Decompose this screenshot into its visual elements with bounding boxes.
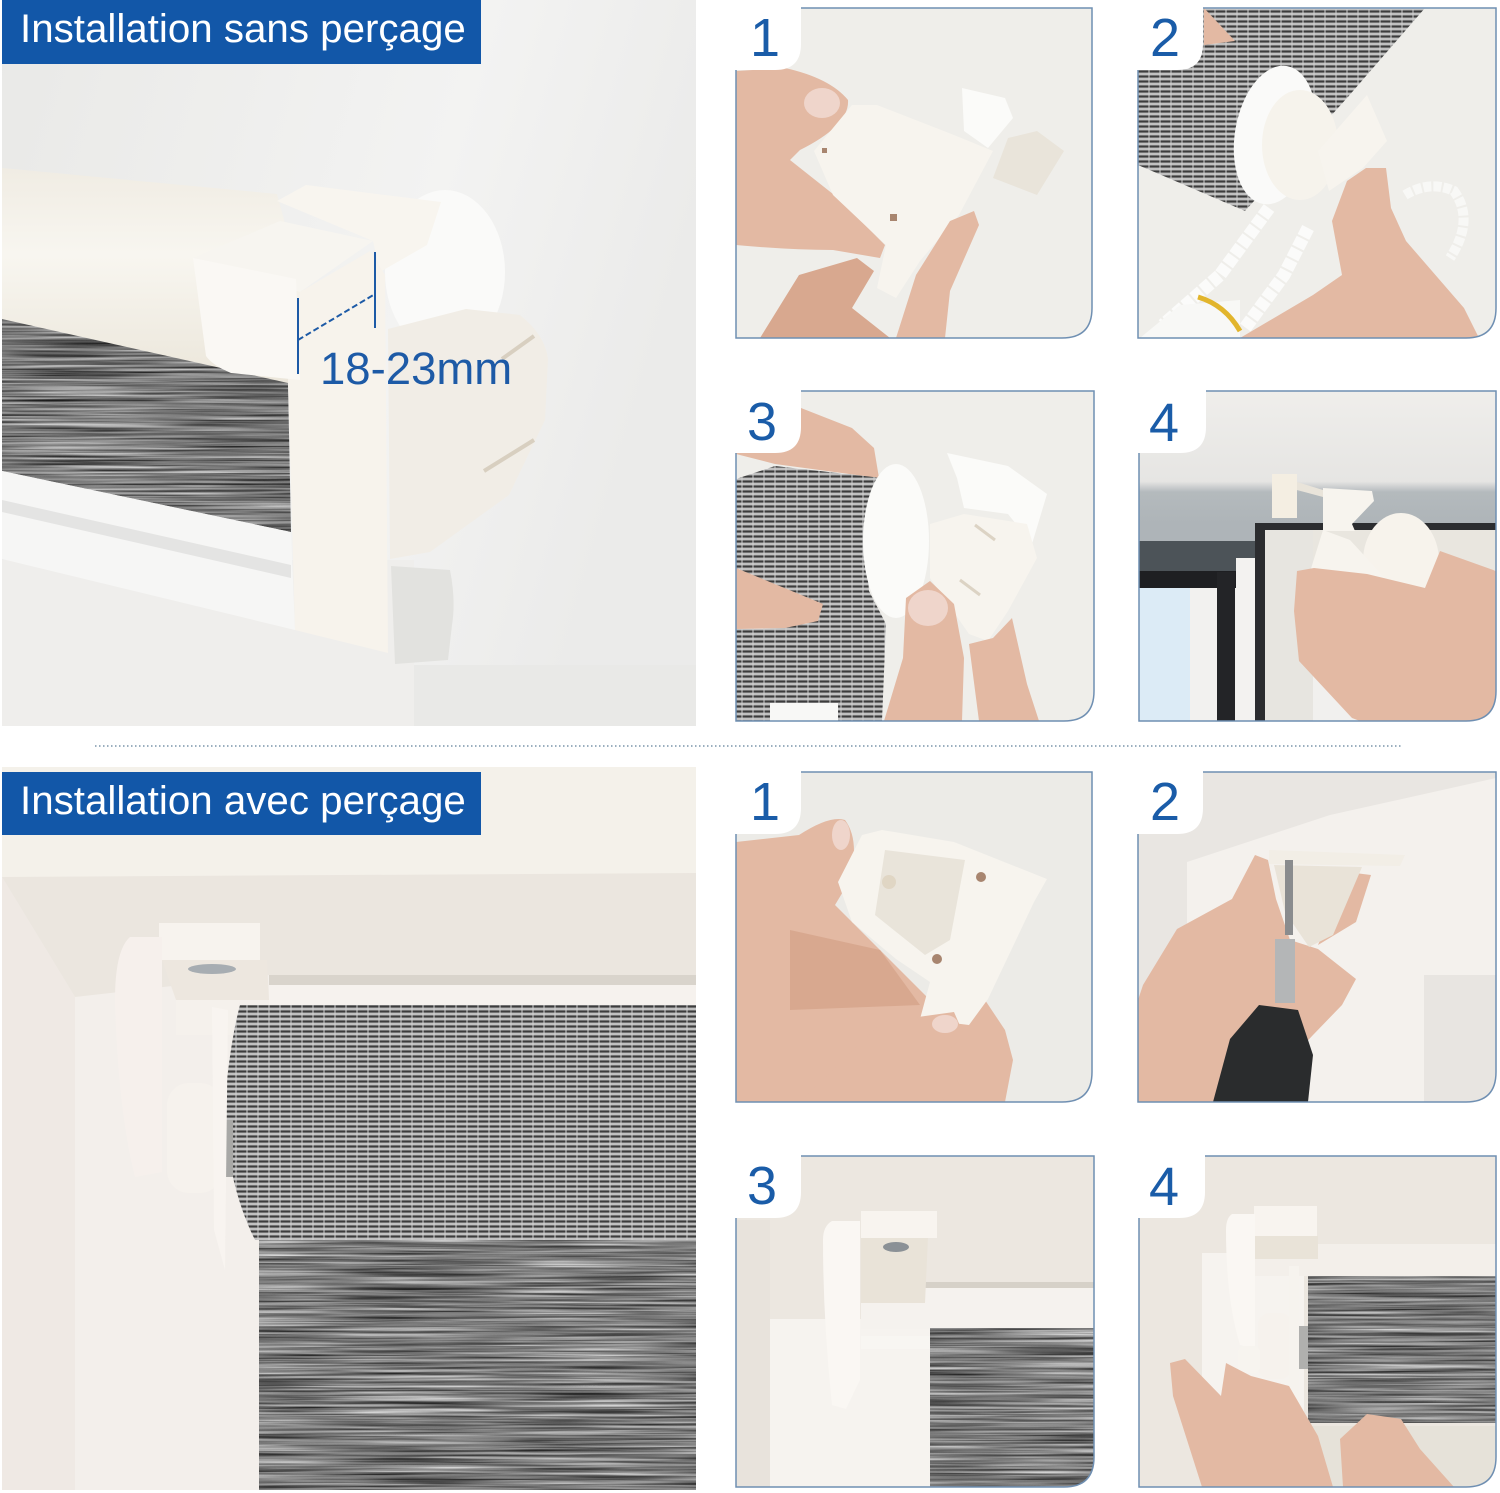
rail (861, 1282, 1094, 1349)
step panel: avec perçage 1 (736, 772, 1094, 1104)
bracket (1226, 1206, 1318, 1426)
rail (1255, 1244, 1496, 1276)
ceiling ledge (2, 767, 696, 877)
step panel frames and numbers, lower row (734, 770, 1496, 1487)
step panel: sans perçage 4 (1139, 391, 1497, 721)
top hand (736, 408, 879, 478)
hand (1240, 168, 1479, 338)
wall (1187, 778, 1496, 1102)
bracket (823, 1211, 937, 1409)
bracket (1274, 865, 1362, 947)
step panel frames and numbers, upper row: 4 (1149, 393, 1179, 453)
heading: installation avec perçage (2, 772, 481, 835)
end cap (1234, 66, 1312, 204)
panel: installation sans perçage, main photo (2, 0, 696, 726)
step panel: sans perçage 3 (736, 391, 1094, 723)
step panel frames and numbers, lower row: 3 (747, 1156, 777, 1216)
hand (736, 68, 885, 258)
step panel frames and numbers, upper row: 3 (747, 392, 777, 452)
yellow ring (1198, 297, 1240, 331)
step panel: sans perçage 2 (1138, 8, 1496, 340)
fabric (930, 1328, 1094, 1488)
hand (1294, 551, 1496, 721)
step panel frames and numbers, lower row: 2 (1150, 772, 1180, 832)
step panel: avec perçage 4 (1139, 1156, 1497, 1488)
step panel frames and numbers, upper row: 2 (1150, 8, 1180, 68)
screw and bit (1275, 860, 1295, 1003)
left wall (2, 877, 75, 1490)
hand (1170, 1359, 1333, 1487)
dimension marks (298, 252, 375, 374)
fingers (896, 211, 979, 338)
fabric (259, 1240, 696, 1490)
inner wall (1202, 1253, 1304, 1487)
step panel: avec perçage 3 (736, 1156, 1094, 1488)
fabric roll (1138, 8, 1425, 211)
panel: installation avec perçage, main photo (2, 767, 696, 1490)
step panel frames and numbers, upper row (734, 6, 1496, 721)
left wall (736, 1220, 770, 1487)
dotted divider (95, 745, 1403, 747)
end cap (863, 464, 929, 618)
heading: installation avec perçage: Installation avec perçage (20, 778, 466, 823)
beads (770, 703, 838, 721)
hand (1138, 855, 1356, 1102)
heading: installation sans perçage: Installation sans perçage (20, 6, 466, 51)
bracket (196, 197, 536, 559)
rail end profile (391, 566, 454, 664)
step panel: sans perçage 1 (736, 8, 1094, 340)
drill (1213, 1005, 1313, 1102)
bracket (838, 830, 1047, 1025)
bracket (947, 453, 1047, 544)
step panel frames and numbers, lower row: 1 (750, 772, 780, 832)
hand (736, 819, 1013, 1102)
bottom rail (2, 471, 295, 630)
window (1139, 523, 1496, 721)
step panel frames and numbers, lower row: 4 (1149, 1157, 1179, 1217)
holes (882, 872, 986, 964)
step panel: avec perçage 2 (1138, 772, 1496, 1104)
bracket (115, 923, 269, 1177)
thumb (800, 1012, 964, 1102)
shade: grey fabric (2, 319, 291, 532)
roll (225, 1005, 696, 1240)
fabric roll (736, 466, 886, 721)
fingers (969, 618, 1039, 721)
heading: installation sans perçage (2, 0, 481, 64)
bracket (1272, 474, 1438, 570)
fabric (1308, 1276, 1496, 1423)
roller disc (437, 201, 505, 314)
step panel frames and numbers, upper row: 1 (750, 8, 780, 68)
rail (269, 975, 696, 985)
left finger (736, 568, 823, 629)
dimension label: 18-23mm (320, 343, 512, 394)
shade: light roller section (2, 193, 288, 383)
bracket (830, 112, 871, 231)
bead chain (1140, 186, 1464, 338)
